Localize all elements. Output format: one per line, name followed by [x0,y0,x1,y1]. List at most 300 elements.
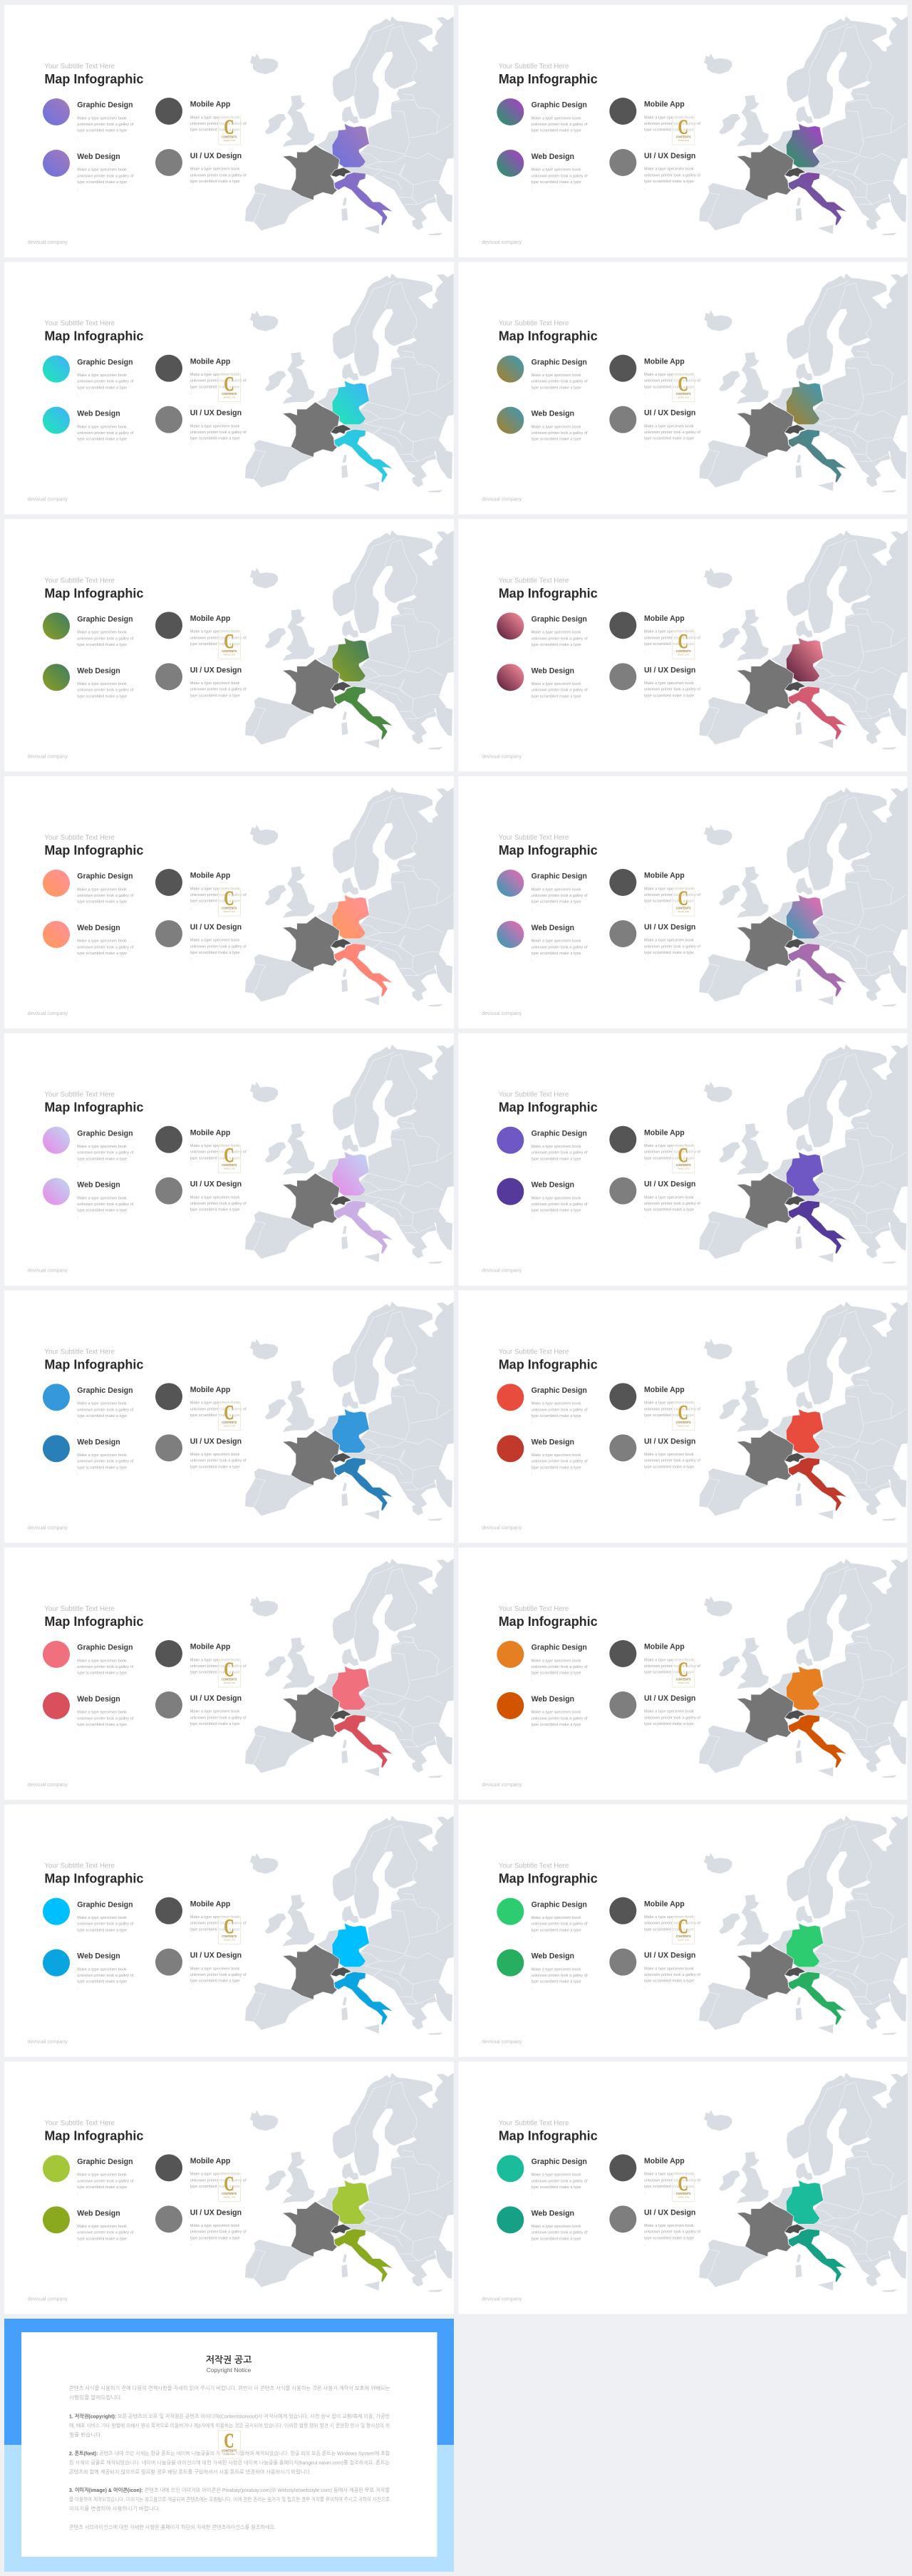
map of Europe [245,1815,454,2035]
legend: Web Design: type scrambled make a type [77,438,127,442]
card background [458,1290,907,1542]
legend: UI / UX Design: unknown printer took a galley of [644,944,700,949]
clause 1: copyright: 매, 배포 서비스 기타 방법에 의해서 영리 목적으로 이용하거나 제3자에게 이용하는 것은 금지되어 있습니다. 이러한 법령 행위 발견 시 준엄한 민사 및 형사상의 처 [69,2422,390,2429]
legend: Graphic Design: unknown printer took a galley of [532,1408,588,1412]
clause 2: font: 콘텐츠와 함께 제공되지 않으므로 필요할 경우 해당 폰트를 구입하셔서 사용 폰트로 변경하여 사용하시기 바랍니다. [69,2469,311,2475]
company label: devisual company [28,2297,68,2302]
legend: Web Design: unknown printer took a galley of [532,174,588,178]
legend: Graphic Design: . [532,1677,533,1681]
legend: Graphic Design [43,612,134,654]
legend: Mobile App: Make a type specimen book [644,115,694,120]
legend: Web Design: type scrambled make a type [77,1723,127,1727]
legend: Mobile App: unknown printer took a galley of [644,893,700,897]
legend: Mobile App [609,1383,700,1424]
clause 3: image and icon: 3. 이미지(image) & 아이콘(icon): 콘텐츠 내에 쓰인 이미지와 아이콘은 Pixabay(pixabay.com)와 Webstyle(webstyle.com) 등에서 제공된 무료 저작물 [69,2487,390,2493]
card background [458,519,907,771]
subtitle: Your Subtitle Text Here [499,1091,569,1099]
legend: Mobile App: . [190,1676,192,1681]
legend: UI / UX Design [155,1434,247,1475]
legend: Web Design: Make a type specimen book [77,168,127,172]
legend: Graphic Design: Graphic Design [77,872,133,881]
watermark: CONTENTS [222,135,237,138]
clause 1: copyright [69,2413,390,2438]
legend: Mobile App: Mobile App [190,1386,231,1394]
legend: Web Design: unknown printer took a galley of [532,1974,588,1978]
legend: Mobile App [155,1897,247,1938]
legend: UI / UX Design: type scrambled make a type [644,1979,694,1984]
legend: UI / UX Design: Make a type specimen book [644,1453,694,1457]
legend: UI / UX Design: UI / UX Design [190,666,242,674]
watermark: MAKE LIFE [678,1682,690,1684]
legend: Graphic Design: unknown printer took a galley of [77,894,134,898]
legend: Graphic Design [497,2155,588,2196]
legend: UI / UX Design: UI / UX Design [190,1952,242,1960]
legend: Web Design: unknown printer took a galley of [532,1202,588,1207]
slide 8: magenta to teal gradient [458,776,908,1029]
watermark [673,115,695,145]
watermark: MAKE LIFE [224,2196,235,2198]
legend: Mobile App: unknown printer took a galley of [190,636,247,640]
legend: Web Design: . [77,958,78,962]
legend: Graphic Design: unknown printer took a galley of [532,380,588,384]
legend: Web Design: Web Design [532,666,574,675]
map of Europe [699,530,908,749]
watermark: MAKE LIFE [678,1939,690,1942]
legend: Graphic Design: Graphic Design [77,1129,133,1138]
legend: Mobile App: Make a type specimen book [190,630,240,634]
legend: Web Design [43,1949,134,1990]
card background [4,519,454,771]
legend: UI / UX Design [155,920,247,962]
legend: UI / UX Design: Make a type specimen book [644,681,694,686]
legend: Web Design: unknown printer took a galley of [532,689,588,693]
legend: Mobile App: Mobile App [644,1900,685,1908]
subtitle: Your Subtitle Text Here [44,63,115,71]
legend: Web Design: unknown printer took a galley of [532,945,588,949]
legend: Mobile App: Make a type specimen book [190,1144,240,1148]
company label: devisual company [482,2297,522,2302]
white notice sheet [21,2332,437,2557]
watermark [673,1401,695,1430]
legend: Mobile App: unknown printer took a galley of [190,1150,247,1155]
map of Europe [699,1044,908,1264]
legend: UI / UX Design [155,149,247,190]
legend: UI / UX Design: UI / UX Design [190,409,242,418]
legend: Mobile App: . [644,1676,646,1681]
legend: Mobile App: Mobile App [190,101,231,109]
legend: Graphic Design: Make a type specimen book [77,887,127,892]
watermark [673,1144,695,1173]
clause 2: font: 2. 폰트(font): 콘텐츠 내에 쓰인 서체는 한글 폰트는 네이버 나눔글꼴의 저작물로 사용하여 제작되었습니다. 한글 외의 모든 폰트는 Windows System에 포함 [69,2451,390,2456]
legend: Web Design [43,1178,134,1219]
legend: UI / UX Design: . [644,1985,646,1989]
legend: Graphic Design: type scrambled make a type [532,2185,581,2190]
legend: Graphic Design: Graphic Design [77,1644,133,1652]
legend: Mobile App: type scrambled make a type [644,1671,694,1675]
title: Map Infographic [499,1357,598,1371]
legend: Graphic Design: Make a type specimen book [532,887,581,892]
watermark: MAKE LIFE [224,654,235,656]
legend: UI / UX Design [609,2205,700,2247]
legend: UI / UX Design: UI / UX Design [644,1437,695,1446]
legend: Web Design: unknown printer took a galley of [77,945,134,949]
legend: Mobile App: Mobile App [644,1386,685,1394]
legend: UI / UX Design [609,920,700,962]
legend: UI / UX Design: unknown printer took a galley of [644,1973,700,1977]
legend: Graphic Design [497,1641,588,1681]
legend: Graphic Design: unknown printer took a galley of [77,380,134,384]
legend: Web Design: . [532,1986,533,1990]
legend: UI / UX Design: type scrambled make a type [190,951,240,955]
legend: Web Design: Web Design [532,924,574,932]
company label: devisual company [482,1269,522,1274]
watermark [218,2173,241,2201]
legend: Mobile App: Make a type specimen book [644,1144,694,1148]
card background [4,2061,454,2314]
legend: Web Design [497,664,588,705]
subtitle: Your Subtitle Text Here [44,834,115,842]
legend: Mobile App: type scrambled make a type [190,1671,240,1675]
legend: Mobile App: Make a type specimen book [190,2173,240,2177]
legend: Graphic Design: Make a type specimen book [532,1402,581,1406]
legend: Web Design: Web Design [77,924,120,932]
legend: Web Design: Web Design [532,153,574,161]
legend: Mobile App: unknown printer took a galley of [190,2178,247,2183]
slide 12: red [458,1290,908,1542]
watermark: MAKE LIFE [678,140,690,142]
watermark: MAKE LIFE [224,1682,235,1684]
watermark: CONTENTS [676,392,691,396]
watermark: CONTENTS [222,907,237,910]
legend: Mobile App: Make a type specimen book [190,1658,240,1662]
legend: UI / UX Design [609,149,700,190]
map of Europe [245,530,454,749]
legend: Web Design: unknown printer took a galley of [77,431,134,436]
legend: Web Design: type scrambled make a type [77,694,127,699]
legend: UI / UX Design: . [190,1471,192,1475]
legend: UI / UX Design: type scrambled make a type [190,1722,240,1726]
company label: devisual company [28,1783,68,1788]
legend: Graphic Design: unknown printer took a galley of [532,1665,588,1669]
legend: Graphic Design: . [532,906,533,910]
legend: Graphic Design: type scrambled make a type [77,386,127,390]
legend: Web Design: Web Design [532,1695,574,1704]
legend: UI / UX Design: Make a type specimen book [644,424,694,428]
legend: Web Design: Web Design [77,1181,120,1190]
legend: UI / UX Design: type scrambled make a type [190,694,240,698]
card background [4,1290,454,1542]
legend: Mobile App: Mobile App [644,1128,685,1137]
legend: Mobile App: Make a type specimen book [644,2173,694,2177]
legend: Mobile App [155,612,247,653]
legend: Web Design: unknown printer took a galley of [77,689,134,693]
watermark: C [224,887,234,910]
subtitle: Your Subtitle Text Here [499,1605,569,1613]
legend: Web Design: unknown printer took a galley of [77,1974,134,1978]
legend: Mobile App: type scrambled make a type [644,128,694,133]
legend: Web Design: . [77,1215,78,1219]
legend: Mobile App: Mobile App [190,1128,231,1137]
slide 6: pink to dark gradient [458,519,908,771]
legend: UI / UX Design: Make a type specimen book [190,2224,240,2228]
legend: Web Design: unknown printer took a galley of [532,2231,588,2235]
legend: UI / UX Design: . [190,1729,192,1733]
legend: Mobile App: unknown printer took a galley of [190,1922,247,1926]
map of Europe [699,2073,908,2292]
legend: Web Design: Make a type specimen book [77,939,127,944]
legend: UI / UX Design: Make a type specimen book [644,1967,694,1971]
legend: Graphic Design: Graphic Design [77,1386,133,1395]
company label: devisual company [28,1011,68,1016]
legend: Mobile App: Mobile App [190,2157,231,2165]
legend: Web Design: Make a type specimen book [77,682,127,686]
map of Europe [245,1559,454,1778]
legend: Graphic Design: Make a type specimen book [77,631,127,635]
legend: UI / UX Design: type scrambled make a type [644,951,694,955]
company label: devisual company [482,754,522,759]
card background [458,1805,907,2057]
legend: Web Design: Web Design [77,1952,120,1961]
watermark: MAKE LIFE [224,1425,235,1427]
title: Map Infographic [44,1614,143,1629]
legend: Web Design: . [77,2243,78,2247]
legend: Web Design [43,1692,134,1733]
watermark: MAKE LIFE [678,397,690,399]
legend: Graphic Design: unknown printer took a galley of [77,123,134,127]
legend: Web Design: type scrambled make a type [532,1465,581,1470]
title: Map Infographic [44,1872,143,1886]
legend: UI / UX Design [609,406,700,447]
legend: UI / UX Design: unknown printer took a galley of [190,688,247,692]
legend: Web Design [43,664,134,705]
legend: UI / UX Design: . [644,1471,646,1475]
legend: Graphic Design: Graphic Design [77,101,133,110]
legend: Graphic Design [43,1384,134,1425]
watermark: C [678,1401,688,1424]
title: Map Infographic [499,1872,598,1886]
watermark [673,887,695,916]
legend: Web Design: Make a type specimen book [77,1967,127,1972]
watermark: MAKE LIFE [224,1939,235,1942]
subtitle: Your Subtitle Text Here [44,1605,115,1613]
watermark [673,373,695,402]
legend: UI / UX Design [155,1178,247,1218]
blue upper band [4,2319,454,2445]
legend: Mobile App: type scrambled make a type [190,385,240,389]
card background [4,776,454,1029]
legend: Mobile App: . [190,905,192,910]
clause 3: image and icon: 을 이용하여 제작되었습니다. 이미지는 참고용으로 제공되며 콘텐츠에는 포함됩니다. 이에 관한 권리는 원저자 및 필요한 경우 저작물 유의하여 주시고 귀하의 사진으로 [69,2496,390,2503]
legend: UI / UX Design: type scrambled make a type [644,180,694,184]
legend: Graphic Design: . [77,906,78,910]
legend: Mobile App: Mobile App [644,872,685,880]
legend: Web Design [43,407,134,448]
legend: UI / UX Design [609,1178,700,1218]
card background [4,1805,454,2057]
legend: UI / UX Design: unknown printer took a galley of [190,173,247,177]
legend: Web Design: . [77,187,78,191]
legend: Mobile App: Mobile App [644,357,685,366]
watermark: CONTENTS [222,1421,237,1424]
watermark: CONTENTS [222,649,237,653]
legend: Mobile App: type scrambled make a type [644,385,694,389]
legend: Web Design: Make a type specimen book [77,1196,127,1200]
legend: Mobile App: type scrambled make a type [644,1927,694,1932]
slide 17: lime [4,2061,454,2314]
legend: UI / UX Design: . [644,1729,646,1733]
slide 5: green gradient [4,519,454,771]
watermark: C [678,630,688,653]
legend: UI / UX Design: Make a type specimen book [190,1195,240,1200]
company label: devisual company [28,1525,68,1530]
legend: Mobile App [609,1126,700,1167]
legend: Graphic Design [497,870,588,910]
legend: Graphic Design: Make a type specimen book [532,2173,581,2178]
legend: UI / UX Design: UI / UX Design [644,1694,695,1703]
legend: UI / UX Design: UI / UX Design [644,152,695,160]
legend: Graphic Design: unknown printer took a galley of [532,637,588,641]
legend: Mobile App: Make a type specimen book [190,373,240,377]
legend: Web Design: type scrambled make a type [532,952,581,956]
watermark [673,630,695,659]
watermark: C [678,1144,688,1167]
legend: Graphic Design: . [77,1934,78,1939]
panel: copyright notice [4,2319,454,2572]
title: Map Infographic [44,586,143,600]
legend: Web Design: Web Design [532,1952,574,1961]
legend: Graphic Design: Graphic Design [532,2158,587,2166]
legend: UI / UX Design: unknown printer took a galley of [190,1459,247,1463]
company label: devisual company [482,1525,522,1530]
watermark: CONTENTS [676,1421,691,1424]
subtitle: Your Subtitle Text Here [44,1863,115,1870]
legend: Web Design: type scrambled make a type [77,1465,127,1470]
legend: UI / UX Design: type scrambled make a type [644,1722,694,1726]
legend: UI / UX Design: Make a type specimen book [644,168,694,172]
legend: Web Design: unknown printer took a galley of [532,1716,588,1721]
legend: Web Design: type scrambled make a type [532,1209,581,1213]
legend: Graphic Design: type scrambled make a type [77,2185,127,2190]
legend: Graphic Design [497,1898,588,1939]
map of Europe [245,1302,454,1520]
legend: UI / UX Design: unknown printer took a galley of [190,1973,247,1977]
legend: Web Design: . [77,1986,78,1990]
legend: UI / UX Design: UI / UX Design [644,409,695,418]
watermark: C [224,2429,234,2452]
company label: devisual company [28,240,68,245]
legend: Mobile App [155,1383,247,1424]
legend: Graphic Design: type scrambled make a type [77,643,127,647]
legend: Mobile App: unknown printer took a galley of [190,893,247,897]
legend: Graphic Design: unknown printer took a galley of [77,1922,134,1927]
legend: Web Design: type scrambled make a type [532,694,581,699]
legend: Mobile App: unknown printer took a galley of [190,379,247,383]
legend: Graphic Design [497,356,588,396]
legend: Web Design: type scrambled make a type [77,952,127,956]
card background [458,2061,907,2314]
legend: UI / UX Design: unknown printer took a galley of [190,1202,247,1206]
legend: Graphic Design: Make a type specimen book [532,1916,581,1920]
slide 18: teal [458,2061,908,2314]
legend: Graphic Design: type scrambled make a type [532,1928,581,1932]
watermark: C [224,1915,234,1938]
legend: Mobile App: Make a type specimen book [644,1915,694,1920]
company label: devisual company [28,754,68,759]
watermark: C [224,373,234,396]
legend: Graphic Design: type scrambled make a type [532,643,581,647]
legend: Mobile App: unknown printer took a galley of [644,1150,700,1155]
legend: Mobile App: Make a type specimen book [190,887,240,891]
legend: Graphic Design [43,870,134,910]
legend: UI / UX Design: UI / UX Design [644,666,695,674]
legend: Graphic Design [43,98,134,139]
slide 14: orange [458,1547,908,1800]
legend: Mobile App: . [644,905,646,910]
legend: Mobile App: unknown printer took a galley of [644,636,700,640]
legend: Mobile App: . [190,649,192,653]
slide 2: purple to green gradient [458,5,908,257]
intro paragraph [69,2385,390,2401]
legend: Graphic Design: . [77,392,78,396]
legend: Mobile App: Make a type specimen book [644,1658,694,1662]
legend: Mobile App: . [644,2191,646,2195]
legend: Graphic Design: type scrambled make a type [532,1157,581,1161]
legend: Web Design: . [532,701,533,705]
map of Europe [245,788,454,1006]
map of Europe [699,1559,908,1778]
legend: Graphic Design: Make a type specimen book [77,1402,127,1406]
legend: Web Design: type scrambled make a type [532,2237,581,2241]
legend: Mobile App: type scrambled make a type [190,900,240,904]
intro paragraph: 콘텐츠 서식을 사용하기 전에 다음의 면책사항을 자세히 읽어 주시기 바랍니다. 위반시 이 콘텐츠 서식을 사용하는 것은 사용자 계약서 보호에 위배되는 [69,2385,390,2391]
watermark: CONTENTS [676,1163,691,1167]
legend: Graphic Design: Make a type specimen book [532,631,581,635]
legend: Graphic Design: . [77,2192,78,2196]
legend: Graphic Design: unknown printer took a galley of [77,2179,134,2183]
legend: Mobile App: unknown printer took a galley of [190,1664,247,1669]
legend: Web Design: . [77,1472,78,1476]
legend: Mobile App [609,869,700,910]
legend: Web Design [43,921,134,962]
company label: devisual company [482,498,522,503]
legend: UI / UX Design: . [190,957,192,962]
legend: Mobile App: . [644,1163,646,1167]
legend: UI / UX Design [609,1949,700,1989]
slide 3: cyan gradient [4,262,454,515]
legend: UI / UX Design: unknown printer took a galley of [644,1716,700,1720]
watermark: CONTENTS [676,1678,691,1681]
legend: Graphic Design: type scrambled make a type [77,1414,127,1418]
company label: devisual company [28,2040,68,2045]
legend: Graphic Design: Make a type specimen book [77,1145,127,1149]
legend: Graphic Design: Graphic Design [532,1644,587,1652]
legend: Graphic Design [497,1127,588,1168]
legend: UI / UX Design: unknown printer took a galley of [190,431,247,435]
legend: Web Design: . [532,958,533,962]
watermark [218,1144,241,1173]
legend: UI / UX Design: unknown printer took a galley of [190,1716,247,1720]
legend: UI / UX Design [155,663,247,704]
legend: Web Design: unknown printer took a galley of [77,2231,134,2235]
watermark: CONTENTS [222,2449,237,2452]
legend: Mobile App: type scrambled make a type [190,128,240,133]
legend: Mobile App: unknown printer took a galley of [644,1407,700,1411]
legend: Graphic Design [43,356,134,396]
legend: Web Design: Make a type specimen book [532,1196,581,1200]
watermark [673,2173,695,2201]
legend: Graphic Design: type scrambled make a type [77,1928,127,1932]
map of Europe [699,788,908,1006]
